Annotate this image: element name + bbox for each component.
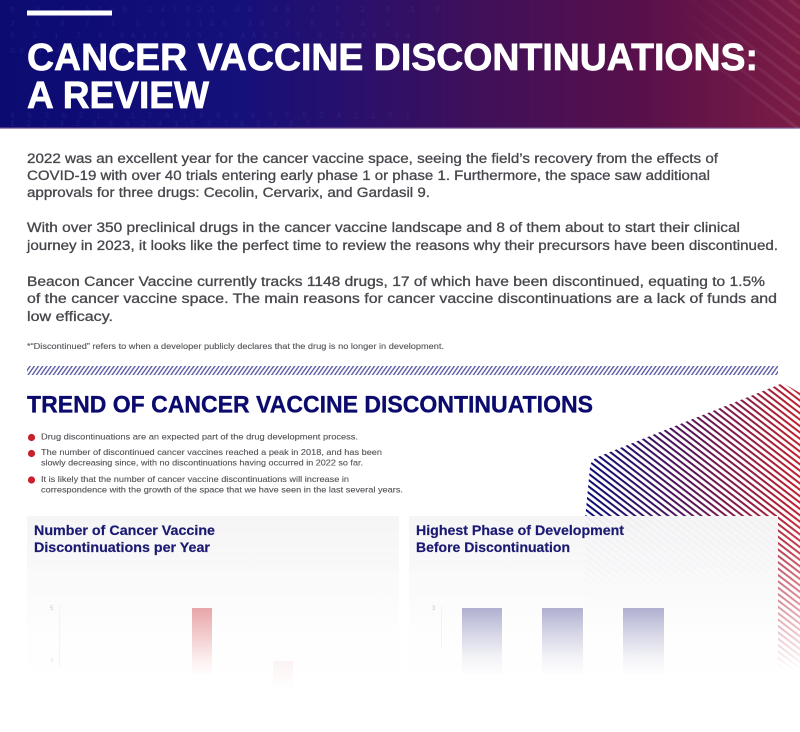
intro text block: journey in 2023, it looks like the perfect time to review the reasons why their precursors have been discontinued. [26,238,778,253]
y axis: 5 [50,606,54,612]
title: CANCER VACCINE DISCONTINUATIONS: [27,37,758,79]
panel title: Before Discontinuation [416,539,570,555]
bar chart [462,608,664,675]
panel title [416,522,624,555]
intro text block: approvals for three drugs: Cecolin, Cervarix, and Gardasil 9. [27,185,430,200]
panel title: Highest Phase of Development [416,522,624,538]
intro text block [26,151,778,324]
y axis: 4 [50,658,54,664]
intro text block: Beacon Cancer Vaccine currently tracks 1148 drugs, 17 of which have been discontinued, equating to 1.5% [27,274,765,289]
title: A REVIEW [27,75,209,117]
bullet 3 [28,475,403,495]
intro text block: With over 350 preclinical drugs in the cancer vaccine landscape and 8 of them about to start their clinical [27,220,740,235]
header banner: 2 1 9 7 4 5 6 X1A8 16 2 8 6 4 1 [10,20,390,29]
accent bar [27,10,112,16]
y axis [432,606,442,648]
header banner: 9 5 3 6 2 1 3 1 7 A 1 6 8 6 4 7 7 5 2 A 1 1 5 1 [10,112,410,121]
intro text block: 2022 was an excellent year for the cancer vaccine space, seeing the field’s recovery from the effects of [27,151,718,166]
y axis: 3 [432,606,436,612]
bullet 1: Drug discontinuations are an expected part of the drug development process. [41,432,358,442]
footnote: *“Discontinued” refers to when a developer publicly declares that the drug is no longer in development. [27,342,444,351]
panel title: Discontinuations per Year [34,539,211,555]
intro text block: COVID-19 with over 40 trials entering early phase 1 or phase 1. Furthermore, the space saw additional [27,168,710,183]
bullet 3: correspondence with the growth of the space that we have seen in the last several years. [41,486,403,495]
header banner [0,0,800,130]
bullet 2: The number of discontinued cancer vaccines reached a peak in 2018, and has been [41,448,382,457]
bullet 2 [28,448,382,468]
bar chart [192,608,293,690]
title [27,37,758,117]
section heading: TREND OF CANCER VACCINE DISCONTINUATIONS [27,392,593,418]
header banner: 9 0 4 A258 147921 AA 48 4 5 2 8 1 8 [10,6,440,15]
y axis [50,606,60,668]
panel title: Number of Cancer Vaccine [34,522,215,538]
panel title [34,522,215,555]
header banner: A891AA 4 851A 9 8 8 9 3 9 5 7 2 6 8 2 [10,47,350,56]
intro text block: of the cancer vaccine space. The main reasons for cancer vaccine discontinuations are a lack of funds and [27,291,777,306]
hatched divider [27,366,778,375]
intro text block: low efficacy. [27,309,113,324]
panel: highest phase of development [409,516,778,696]
decorative banner stripes [620,0,800,130]
decorative striped hexagon [585,384,800,664]
header banner: 5 3 1 7 8 8A175 A9 8 AA32 7 8 2158 34 [10,32,410,41]
bullet list [28,432,403,495]
bullet 3: It is likely that the number of cancer vaccine discontinuations will increase in [41,475,349,484]
header banner: 1 2 1 4 2 3 8 8 2 4 1 5 9 7 A 3 4 8 7 [10,120,310,129]
panel: discontinuations per year [27,516,399,696]
bullet 2: slowly decreasing since, with no discontinuations having occurred in 2022 so far. [41,459,363,468]
